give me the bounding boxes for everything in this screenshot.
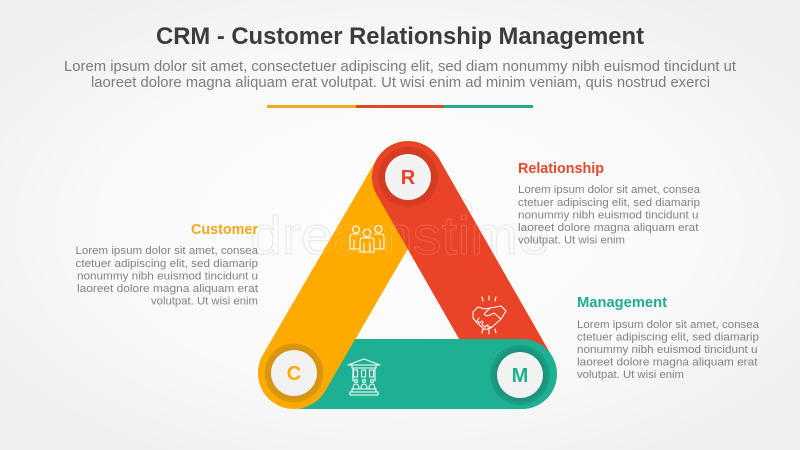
node: M: M [512, 365, 528, 387]
text block: Customer: laoreet dolore magna aliquam erat [77, 283, 258, 295]
node: R: R [401, 167, 416, 189]
text block: Relationship: ctetuer adipiscing elit, sed diamarip [518, 197, 700, 209]
text block: Management [577, 295, 760, 381]
icon: handshake [473, 296, 506, 334]
title: CRM - Customer Relationship Management [156, 24, 644, 50]
text block: Relationship [518, 161, 701, 246]
text block: Relationship: volutpat. Ut wisi enim [518, 234, 625, 246]
watermark overlay: dreamstime [250, 206, 550, 266]
triangle diagram [258, 147, 550, 409]
band: customer (orange) [294, 177, 408, 373]
text block: Customer: Lorem ipsum dolor sit amet, consea [76, 245, 259, 257]
subtitle text [64, 59, 736, 91]
text block: Customer: volutpat. Ut wisi enim [151, 296, 258, 308]
icon: institution [348, 359, 380, 395]
text block: Customer: Customer [191, 222, 258, 238]
node: M [490, 345, 550, 405]
text block: Customer [76, 222, 259, 308]
node: C: C [287, 363, 301, 385]
text block: Customer: nonummy nibh euismod tincidunt u [77, 270, 258, 282]
text block: Relationship: Relationship [518, 161, 604, 177]
icon: team [350, 226, 384, 252]
text block: Relationship: laoreet dolore magna aliquam erat [518, 222, 698, 234]
text block: Management: ctetuer adipiscing elit, sed diamarip [577, 332, 759, 344]
text block: Customer: ctetuer adipiscing elit, sed diamarip [76, 258, 258, 270]
text block: Relationship: nonummy nibh euismod tincidunt u [518, 210, 698, 222]
node: R [378, 147, 438, 207]
band: management (teal) [304, 339, 522, 409]
watermark: dreamstime [250, 206, 550, 266]
text block: Management: Lorem ipsum dolor sit amet, consea [577, 319, 760, 331]
subtitle text: laoreet dolore magna aliquam erat volutpat. Ut wisi enim ad minim veniam, quis nostrud exerci [91, 75, 710, 91]
band: relationship (red) [408, 177, 520, 373]
band overlap: orange end over teal [258, 285, 345, 409]
text block: Management: volutpat. Ut wisi enim [577, 369, 684, 381]
subtitle text: Lorem ipsum dolor sit amet, consectetuer adipiscing elit, sed diam nonummy nibh euismod tincidunt ut [64, 59, 736, 75]
text block: Relationship: Lorem ipsum dolor sit amet, consea [518, 184, 701, 196]
text block: Management: nonummy nibh euismod tincidunt u [577, 344, 758, 356]
node: C [264, 344, 324, 402]
text block: Management: Management [577, 295, 667, 311]
tricolor divider [267, 105, 533, 108]
text block: Management: laoreet dolore magna aliquam erat [577, 356, 758, 368]
